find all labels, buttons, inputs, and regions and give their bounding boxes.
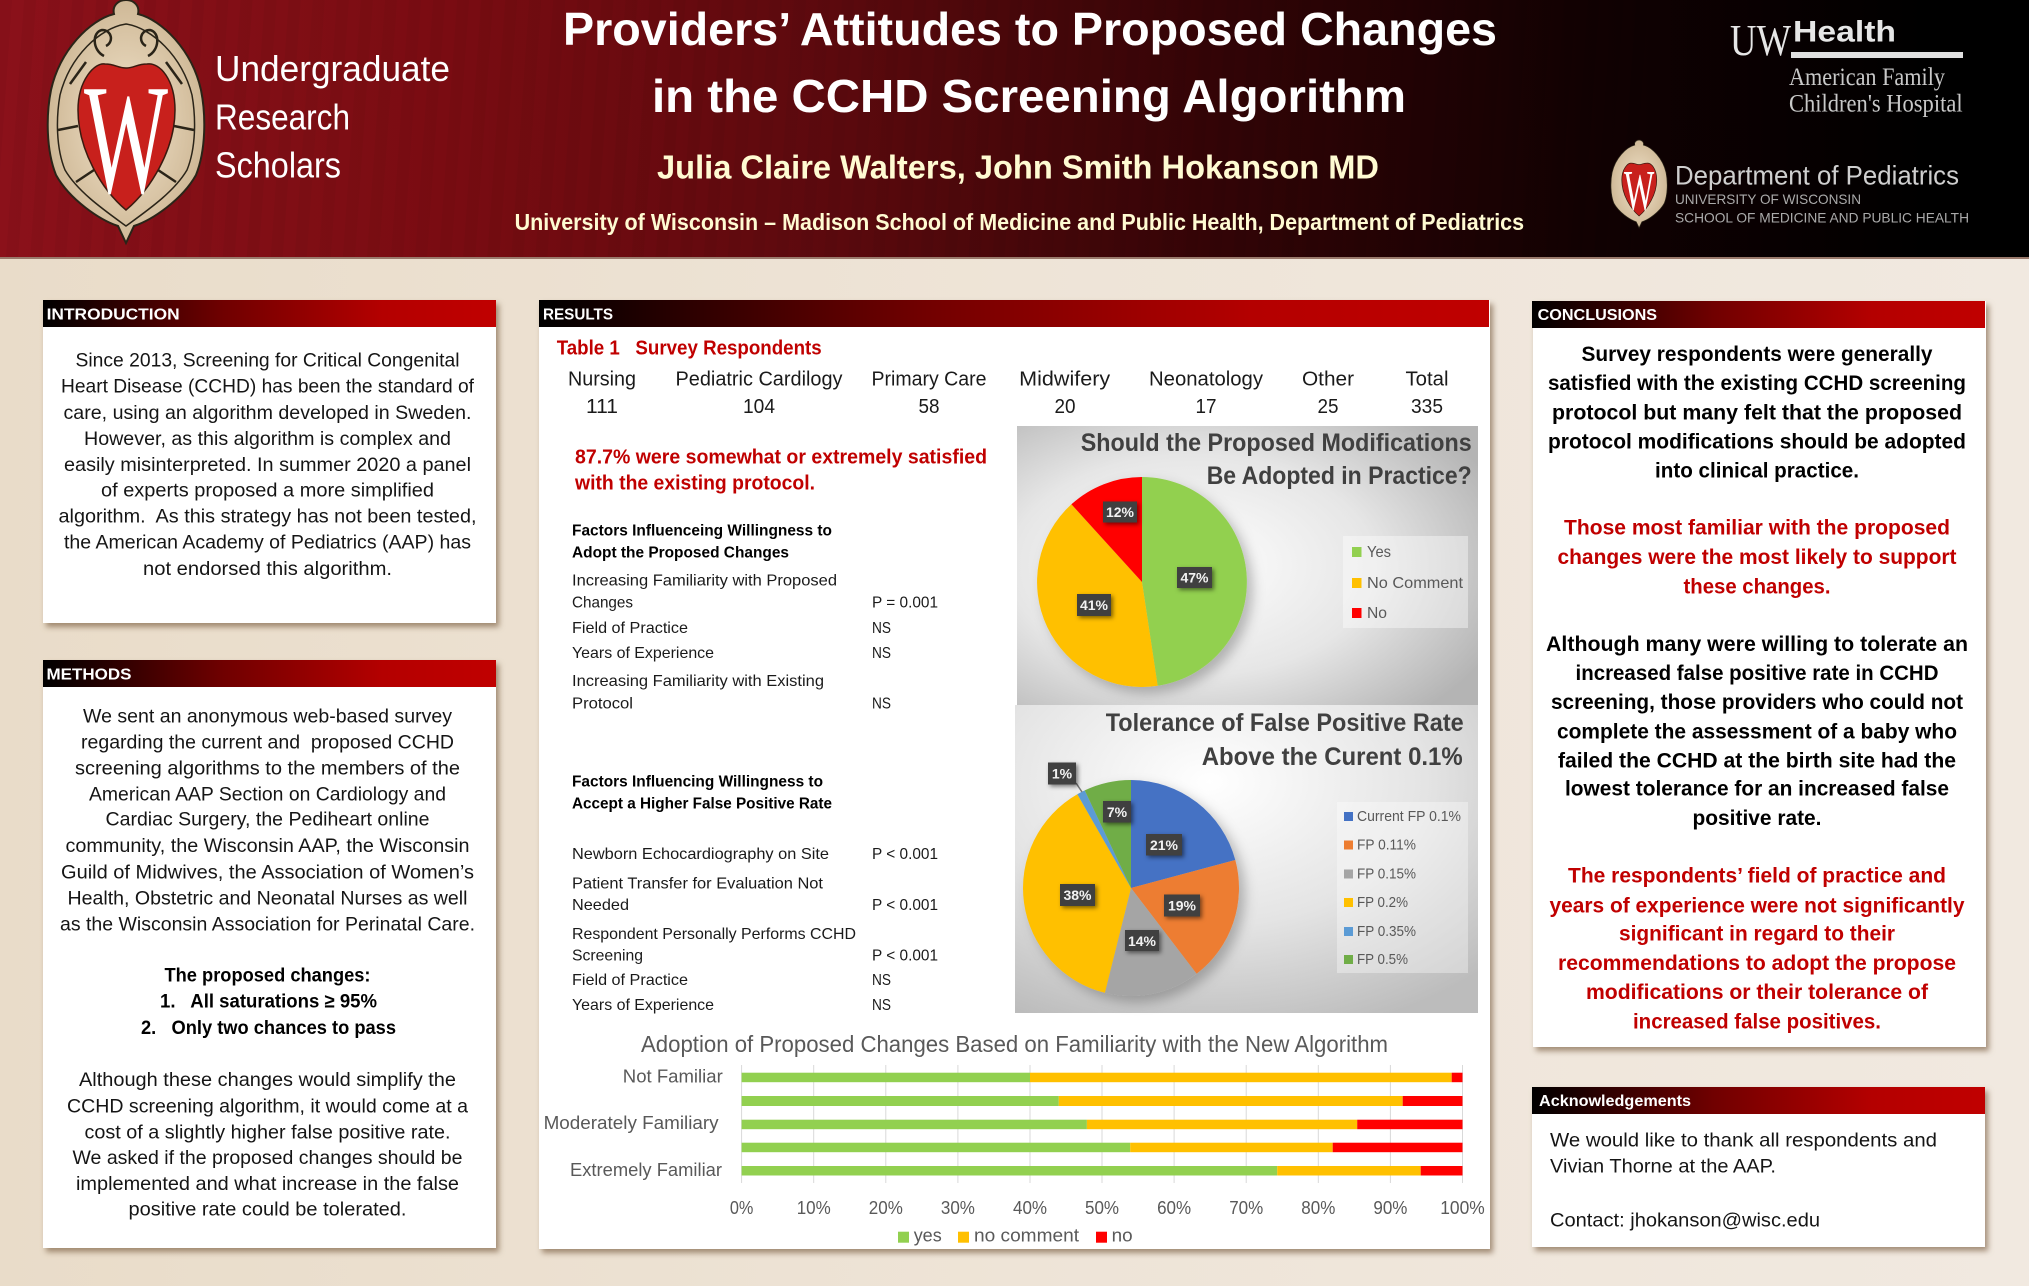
chart: stacked bars, adoption by familiarity: 60% [1157, 1198, 1191, 1218]
text: methods description: Guild of Midwives, the Association of Women’s [61, 861, 474, 883]
text: methods rationale: Although these changes would simplify the [79, 1069, 456, 1091]
table: survey respondents: Pediatric Cardilogy [676, 368, 842, 390]
logo: Department of Pediatrics: UNIVERSITY OF WISCONSIN [1675, 191, 1861, 207]
text: acknowledgements body: We would like to thank all respondents and [1550, 1130, 1937, 1152]
text: conclusion four [1550, 865, 1965, 1033]
header banner [0, 0, 2029, 259]
table: survey respondents: Primary Care [872, 368, 986, 390]
table: survey respondents: Total [1406, 368, 1448, 390]
chart: pie, adoption in practice: Should the Proposed Modifications [1081, 429, 1472, 457]
table: survey respondents: Other [1302, 368, 1354, 390]
panel: methods [43, 660, 496, 1248]
table: factors influencing adoption [572, 522, 938, 713]
chart: stacked bars, adoption by familiarity: 20% [869, 1198, 903, 1218]
text: conclusion four: years of experience were not significantly [1550, 894, 1965, 917]
table: factors influencing adoption: Adopt the Proposed Changes [572, 545, 789, 562]
table: factors influencing adoption: NS [872, 620, 891, 637]
chart: pie, false positive tolerance: 38% [1063, 887, 1092, 903]
chart: pie, adoption in practice: Yes [1367, 544, 1391, 561]
table: factors influencing adoption: Years of Experience [572, 645, 714, 662]
text: conclusion four: increased false positives. [1633, 1010, 1881, 1033]
text: methods description: as the Wisconsin Association for Perinatal Care. [60, 914, 475, 936]
text: methods description: regarding the current and proposed CCHD [81, 731, 454, 753]
logo: UW Health: UW [1730, 16, 1791, 65]
logo: Department of Pediatrics: W [1624, 160, 1654, 223]
text: conclusion four: The respondents’ field of practice and [1568, 865, 1946, 888]
logo: Department of Pediatrics [1611, 140, 1969, 228]
table: survey respondents: Nursing [568, 368, 636, 390]
text: conclusion two: these changes. [1684, 575, 1830, 598]
chart: stacked bars, adoption by familiarity: Extremely Familiar [570, 1160, 722, 1180]
chart: pie, adoption in practice: No [1367, 605, 1387, 622]
chart: pie, false positive tolerance: Tolerance of False Positive Rate [1106, 709, 1464, 737]
table: survey respondents: 104 [743, 396, 775, 418]
table: factors influencing adoption: NS [872, 645, 891, 662]
table: factors influencing false positive tolerance: Field of Practice [572, 972, 688, 989]
table: survey respondents: 335 [1411, 396, 1443, 418]
text: conclusion three: Although many were willing to tolerate an [1546, 633, 1968, 656]
text: introduction body: not endorsed this algorithm. [143, 558, 392, 580]
table: survey respondents: 25 [1318, 396, 1338, 418]
table: factors influencing adoption: Increasing Familiarity with Proposed [572, 573, 837, 590]
heading: methods: METHODS [46, 666, 132, 684]
text: conclusion three: screening, those providers who could not [1551, 691, 1963, 714]
chart: stacked bars, adoption by familiarity: 70% [1229, 1198, 1263, 1218]
text: introduction body: However, as this algorithm is complex and [84, 428, 451, 450]
logo: UW Health: Children's Hospital [1789, 91, 1963, 118]
table: survey respondents: Neonatology [1149, 368, 1263, 390]
chart: pie, false positive tolerance: FP 0.11% [1357, 837, 1416, 853]
logo: Department of Pediatrics: SCHOOL OF MEDICINE AND PUBLIC HEALTH [1675, 210, 1969, 226]
table: factors influencing adoption: Factors Influenceing Willingness to [572, 522, 832, 540]
text: conclusion one: satisfied with the existing CCHD screening [1548, 372, 1966, 395]
table: factors influencing false positive tolerance: P < 0.001 [872, 846, 938, 863]
chart: stacked bars, adoption by familiarity: 30% [941, 1198, 975, 1218]
table: survey respondents: 58 [918, 396, 940, 418]
heading: introduction [43, 300, 496, 327]
panel: results [539, 300, 1490, 1249]
text: conclusion one: into clinical practice. [1655, 459, 1859, 482]
chart: pie, adoption in practice: No Comment [1367, 575, 1464, 592]
table: factors influencing false positive tolerance: Needed [572, 897, 629, 914]
program name: Scholars [215, 145, 341, 186]
chart: pie, false positive tolerance: FP 0.15% [1357, 866, 1416, 882]
icon: UW crest [48, 0, 204, 243]
table: survey respondents: Table 1 Survey Respondents [557, 338, 822, 360]
text: conclusion three: positive rate. [1692, 807, 1822, 830]
text: conclusion two: Those most familiar with the proposed [1564, 516, 1950, 539]
chart: pie, false positive tolerance: 1% [1052, 766, 1073, 782]
chart: stacked bars, adoption by familiarity: 0% [730, 1198, 753, 1218]
chart: stacked bars, adoption by familiarity: Adoption of Proposed Changes Based on Familiarity with the New Algorithm [641, 1031, 1388, 1057]
affiliation: University of Wisconsin – Madison School of Medicine and Public Health, Department of Pediatrics [515, 209, 1524, 235]
panel: introduction [43, 300, 496, 623]
callout: satisfaction [574, 446, 987, 495]
text: conclusion three: complete the assessment of a baby who [1557, 720, 1957, 743]
text: introduction body: care, using an algorithm developed in Sweden. [64, 402, 472, 424]
table: factors influencing false positive tolerance [572, 774, 938, 1014]
text: methods description: community, the Wisconsin AAP, the Wisconsin [66, 835, 470, 857]
heading: introduction: INTRODUCTION [47, 306, 180, 324]
chart: pie, false positive tolerance: Current FP 0.1% [1357, 809, 1461, 825]
table: survey respondents [557, 338, 1448, 418]
table: factors influencing adoption: NS [872, 696, 891, 713]
text: introduction body [58, 350, 476, 580]
table: factors influencing false positive tolerance: Screening [572, 948, 643, 964]
text: conclusion three [1546, 633, 1968, 830]
icon: UW crest: W [84, 52, 168, 226]
title: in the CCHD Screening Algorithm [652, 70, 1406, 122]
heading: results: RESULTS [543, 306, 613, 324]
chart: pie, adoption in practice: Be Adopted in Practice? [1207, 462, 1472, 490]
text: proposed changes list: 1. All saturations ≥ 95% [160, 991, 377, 1013]
chart: pie, false positive tolerance: 7% [1107, 804, 1128, 820]
chart: stacked bars, adoption by familiarity: no [1112, 1226, 1133, 1246]
chart: pie, false positive tolerance [1015, 705, 1478, 1013]
text: conclusion one: protocol modifications should be adopted [1548, 430, 1966, 453]
text: methods description: American AAP Section on Cardiology and [89, 784, 446, 806]
chart: pie, false positive tolerance: 14% [1128, 933, 1157, 949]
program name: Undergraduate [215, 48, 450, 89]
heading: results [539, 300, 1489, 327]
table: survey respondents: Midwifery [1019, 368, 1110, 390]
text: methods rationale: positive rate could be tolerated. [128, 1199, 406, 1221]
chart: pie, adoption in practice [1017, 426, 1478, 705]
table: factors influencing false positive tolerance: Newborn Echocardiography on Site [572, 846, 829, 863]
text: conclusion one: Survey respondents were generally [1582, 343, 1933, 366]
text: conclusion one: protocol but many felt that the proposed [1552, 401, 1962, 424]
table: factors influencing false positive tolerance: Respondent Personally Performs CCHD [572, 926, 856, 943]
callout: satisfaction: with the existing protocol. [574, 472, 815, 495]
program name [215, 48, 450, 186]
text: conclusion two: changes were the most likely to support [1558, 546, 1957, 569]
chart: stacked bars, adoption by familiarity: no comment [974, 1226, 1079, 1246]
text: methods rationale: We asked if the proposed changes should be [72, 1147, 462, 1169]
text: proposed changes list: 2. Only two chances to pass [141, 1017, 396, 1039]
table: factors influencing adoption: Changes [572, 595, 633, 612]
chart: stacked bars, adoption by familiarity: 90% [1373, 1198, 1407, 1218]
text: introduction body: Heart Disease (CCHD) has been the standard of [61, 376, 475, 398]
table: factors influencing adoption: Field of Practice [572, 620, 688, 637]
text: introduction body: the American Academy of Pediatrics (AAP) has [64, 532, 471, 554]
text: introduction body: easily misinterpreted. In summer 2020 a panel [64, 454, 471, 476]
table: factors influencing adoption: Increasing Familiarity with Existing [572, 673, 824, 690]
chart: stacked bars, adoption by familiarity: 10% [797, 1198, 831, 1218]
table: factors influencing adoption: P = 0.001 [872, 595, 938, 612]
chart: pie, false positive tolerance: FP 0.35% [1357, 924, 1416, 940]
text: methods description: Cardiac Surgery, the Pediheart online [106, 809, 430, 831]
chart: pie, adoption in practice: 12% [1106, 504, 1135, 520]
table: survey respondents: 111 [586, 396, 618, 418]
table: survey respondents: 20 [1054, 396, 1076, 418]
text: proposed changes list [141, 965, 396, 1039]
text: methods rationale [67, 1069, 468, 1221]
logo: UW Health: Health [1793, 16, 1896, 49]
text: methods rationale: CCHD screening algorithm, it would come at a [67, 1095, 468, 1117]
heading: conclusions [1532, 301, 1985, 328]
chart: pie, false positive tolerance: FP 0.5% [1357, 952, 1408, 968]
text: methods description: We sent an anonymous web-based survey [83, 705, 452, 727]
text: methods rationale: cost of a slightly higher false positive rate. [84, 1121, 450, 1143]
panel: conclusions [1532, 301, 1986, 1047]
table: factors influencing false positive tolerance: P < 0.001 [872, 897, 938, 914]
text: conclusion one [1548, 343, 1966, 482]
heading: conclusions: CONCLUSIONS [1538, 307, 1657, 324]
chart: stacked bars, adoption by familiarity: 80% [1301, 1198, 1335, 1218]
text: introduction body: Since 2013, Screening for Critical Congenital [76, 350, 460, 372]
table: factors influencing false positive tolerance: Accept a Higher False Positive Rate [572, 796, 832, 813]
table: factors influencing false positive tolerance: NS [872, 972, 891, 989]
text: acknowledgements body: Contact: jhokanson@wisc.edu [1550, 1210, 1820, 1232]
text: methods description: Health, Obstetric and Neonatal Nurses as well [68, 887, 468, 909]
chart: stacked bars, adoption by familiarity: Not Familiar [623, 1067, 723, 1087]
table: factors influencing false positive tolerance: Factors Influencing Willingness to [572, 774, 823, 791]
text: conclusion three: failed the CCHD at the birth site had the [1558, 749, 1956, 772]
text: methods description: screening algorithms to the members of the [75, 757, 460, 779]
text: conclusion four: recommendations to adopt the propose [1558, 952, 1956, 975]
text: conclusion two [1558, 516, 1957, 598]
text: acknowledgements body [1550, 1130, 1937, 1232]
logo: Department of Pediatrics: Department of Pediatrics [1675, 160, 1959, 190]
table: factors influencing false positive tolerance: NS [872, 997, 891, 1014]
chart: pie, false positive tolerance: 19% [1168, 898, 1197, 914]
chart: stacked bars, adoption by familiarity: 40% [1013, 1198, 1047, 1218]
heading: acknowledgements: Acknowledgements [1539, 1093, 1691, 1110]
text: conclusion three: lowest tolerance for an increased false [1565, 778, 1949, 801]
chart: pie, false positive tolerance: 21% [1150, 837, 1179, 853]
table: survey respondents: 17 [1196, 396, 1216, 418]
text: conclusion three: increased false positive rate in CCHD [1576, 662, 1938, 685]
table: factors influencing adoption: Protocol [572, 696, 633, 713]
text: introduction body: algorithm. As this strategy has not been tested, [58, 506, 476, 528]
chart: stacked bars, adoption by familiarity [544, 1031, 1485, 1246]
title [563, 3, 1497, 122]
table: factors influencing false positive tolerance: Patient Transfer for Evaluation Not [572, 876, 824, 893]
text: proposed changes list: The proposed changes: [164, 965, 370, 987]
chart: stacked bars, adoption by familiarity: yes [914, 1226, 942, 1246]
authors: Julia Claire Walters, John Smith Hokanson MD [657, 148, 1379, 185]
heading: methods [43, 660, 496, 687]
text: conclusion four: modifications or their tolerance of [1586, 981, 1929, 1004]
title: Providers’ Attitudes to Proposed Changes [563, 3, 1497, 55]
logo: UW Health: American Family [1789, 64, 1945, 91]
chart: pie, adoption in practice: 41% [1080, 597, 1109, 613]
text: conclusion four: significant in regard to their [1619, 923, 1895, 946]
callout: satisfaction: 87.7% were somewhat or extremely satisfied [575, 446, 987, 468]
text: introduction body: of experts proposed a more simplified [101, 480, 434, 502]
heading: acknowledgements [1532, 1087, 1985, 1114]
chart: pie, false positive tolerance: FP 0.2% [1357, 895, 1408, 911]
panel: acknowledgements [1532, 1087, 1985, 1247]
text: methods description [60, 705, 475, 936]
table: factors influencing false positive tolerance: P < 0.001 [872, 948, 938, 964]
program name: Research [215, 96, 350, 137]
chart: pie, false positive tolerance: Above the Curent 0.1% [1202, 743, 1463, 771]
chart: pie, adoption in practice: 47% [1180, 570, 1209, 586]
chart: stacked bars, adoption by familiarity: Moderately Familiary [544, 1113, 719, 1133]
text: acknowledgements body: Vivian Thorne at the AAP. [1550, 1156, 1776, 1178]
table: factors influencing false positive tolerance: Years of Experience [572, 997, 714, 1014]
chart: stacked bars, adoption by familiarity: 50% [1085, 1198, 1119, 1218]
chart: stacked bars, adoption by familiarity: 100% [1440, 1198, 1485, 1218]
text: methods rationale: implemented and what increase in the false [76, 1173, 459, 1195]
logo: UW Health [1730, 16, 1963, 118]
